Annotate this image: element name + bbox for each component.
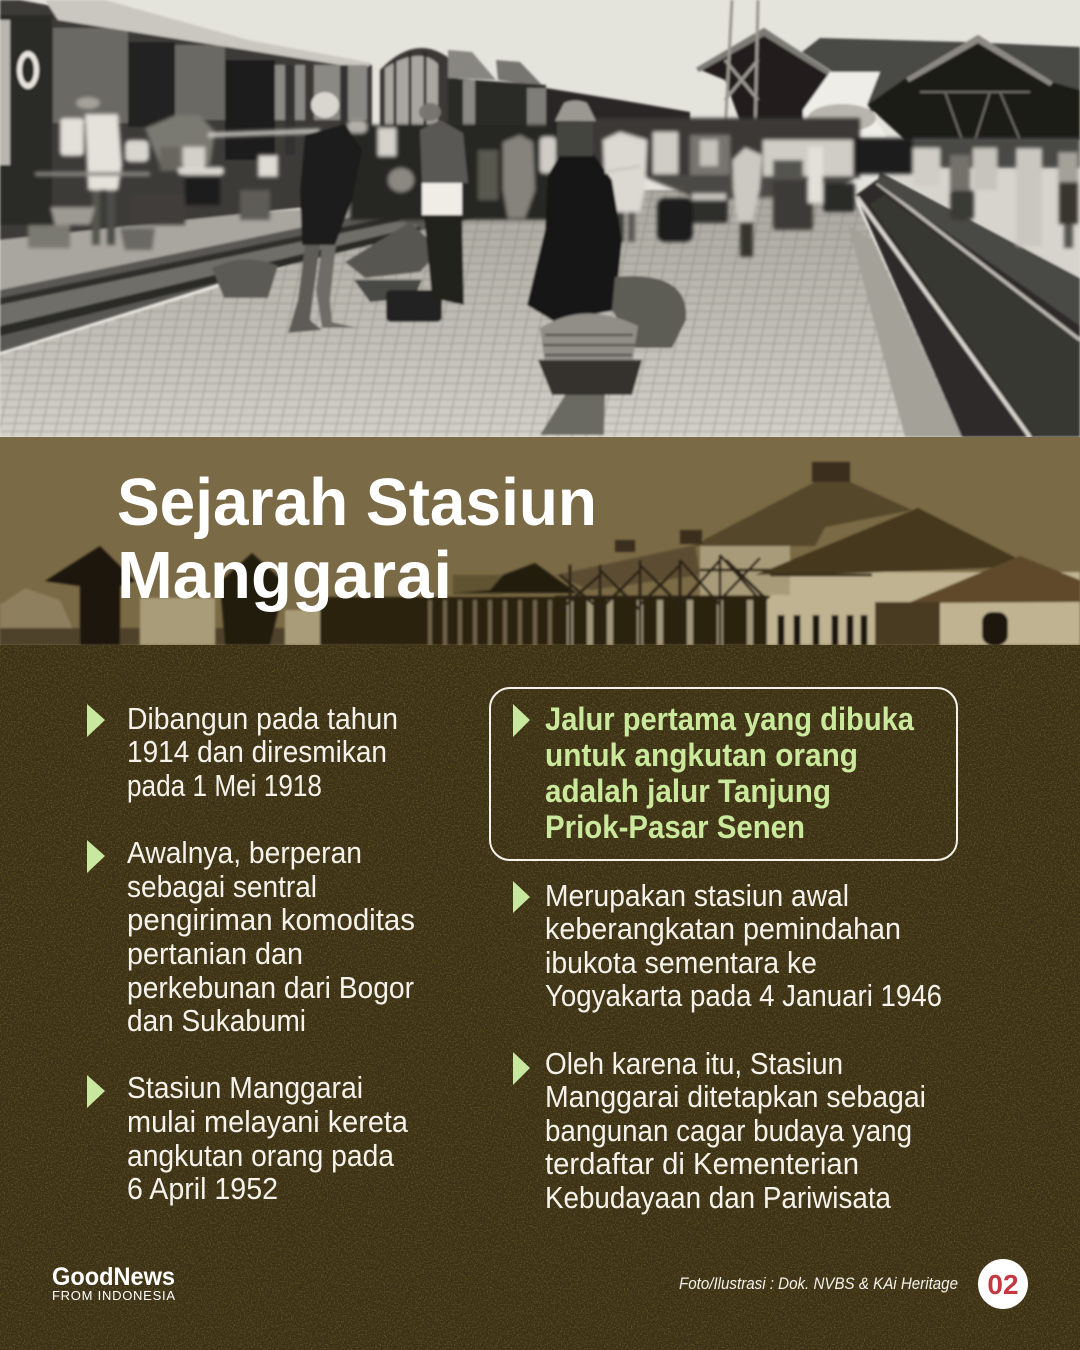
bullet 2: pengiriman komoditas: [127, 902, 415, 937]
bullet 6: [513, 1046, 926, 1215]
bullet 6: Kebudayaan dan Pariwisata: [545, 1180, 892, 1215]
bullet 6: Oleh karena itu, Stasiun: [545, 1046, 843, 1081]
logo: GoodNews from Indonesia: [52, 1263, 175, 1303]
central cloaked figure with baskets: [527, 100, 686, 435]
left platform and track: [0, 206, 472, 353]
logo: GoodNews from Indonesia: GoodNews: [52, 1263, 175, 1291]
bullet 5: [513, 878, 942, 1013]
train carriages: [0, 0, 690, 240]
panel: main content: [0, 645, 1080, 1350]
bullet 1: 1914 dan diresmikan: [127, 734, 387, 769]
bullet 2: Awalnya, berperan: [127, 835, 362, 870]
bullet 3: angkutan orang pada: [127, 1138, 395, 1173]
bullet 6: terdaftar di Kementerian: [545, 1146, 859, 1181]
right column bullets: [490, 688, 957, 1215]
logo: GoodNews from Indonesia: FROM INDONESIA: [52, 1288, 175, 1303]
man in white sash: [419, 103, 468, 305]
left column bullets: [87, 701, 415, 1206]
crowd on platform: [347, 118, 1080, 242]
bullet 5: ibukota sementara ke: [545, 945, 817, 980]
bullet 1: pada 1 Mei 1918: [127, 768, 322, 803]
right railway track: [856, 176, 1080, 437]
bullet 3: mulai melayani kereta: [127, 1104, 409, 1139]
page number badge: [978, 1259, 1028, 1309]
platform and brick floor: [0, 190, 965, 437]
bullet 5: Yogyakarta pada 4 Januari 1946: [545, 978, 942, 1013]
bullet 3: [87, 1070, 409, 1206]
bullet 6: bangunan cagar budaya yang: [545, 1113, 912, 1148]
panel: title band: [0, 437, 1080, 645]
left group of workers: [28, 97, 320, 250]
bullet 2: pertanian dan: [127, 936, 303, 971]
bullet 6: Manggarai ditetapkan sebagai: [545, 1079, 926, 1114]
bullet 2: dan Sukabumi: [127, 1003, 306, 1038]
bullet 2: sebagai sentral: [127, 869, 317, 904]
porter carrying baskets: [212, 92, 442, 333]
bullet 5: keberangkatan pemindahan: [545, 911, 901, 946]
page number badge: 02: [987, 1269, 1019, 1300]
bullet 1: [87, 701, 398, 803]
highlighted callout: Jalur pertama yang dibuka: [545, 701, 914, 737]
station roofs: [696, 0, 1080, 140]
highlighted callout: untuk angkutan orang: [545, 737, 858, 773]
distant figures and baskets: [657, 147, 1078, 257]
highlighted callout: [490, 688, 957, 860]
bullet 2: perkebunan dari Bogor: [127, 970, 414, 1005]
right platform: [877, 170, 1080, 326]
bullet 2: [87, 835, 415, 1038]
highlighted callout: Priok-Pasar Senen: [545, 809, 805, 845]
highlighted callout: adalah jalur Tanjung: [545, 773, 831, 809]
heading: Manggarai: [117, 538, 452, 613]
heading: [117, 465, 597, 613]
illustration: Manggarai station building: [0, 462, 1080, 645]
bullet 3: 6 April 1952: [127, 1171, 278, 1206]
panel: historic photo of station platform: [0, 0, 1080, 437]
photo credit: Foto/Ilustrasi : Dok. NVBS & KAi Heritage: [679, 1274, 958, 1293]
bullet 5: Merupakan stasiun awal: [545, 878, 849, 913]
heading: Sejarah Stasiun: [117, 465, 597, 540]
bullet 3: Stasiun Manggarai: [127, 1070, 363, 1105]
bullet 1: Dibangun pada tahun: [127, 701, 398, 736]
